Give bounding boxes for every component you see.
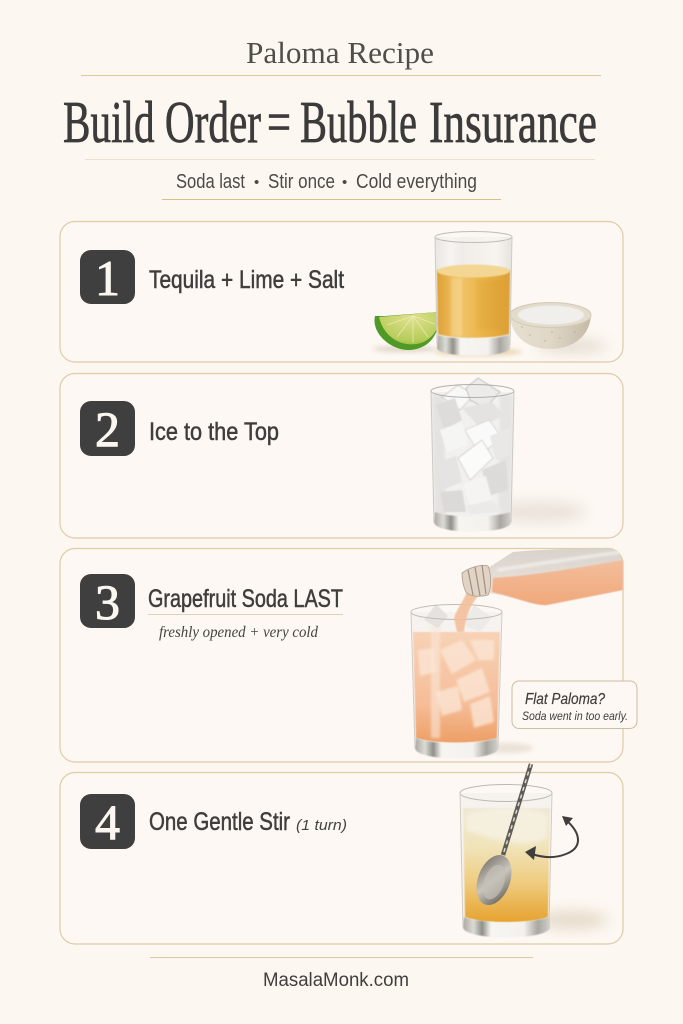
illustration: glass with spoon [460,764,608,938]
panel: step 4 [60,764,623,944]
step 2 heading: Ice to the Top [149,418,279,446]
title: Paloma Recipe: Paloma Recipe [246,35,434,70]
panel: step 3 [60,548,637,762]
illustration: glass with soda and ice [411,604,533,758]
panel: step 1 [60,222,623,362]
subtitle: Cold everything [356,171,477,193]
main heading: Insurance [429,89,597,155]
step 3 note: freshly opened + very cold [159,624,318,641]
callout: flat paloma: Soda went in too early. [522,709,628,723]
main heading [63,89,597,155]
illustration: glass with tequila [434,232,522,356]
subtitle: Soda last [176,171,245,193]
illustration: bottle pouring soda [454,549,623,632]
step 3 number badge [80,574,135,630]
step 4 heading: (1 turn) [296,817,347,834]
spoon [470,764,531,910]
subtitle: • [342,174,347,191]
callout: flat paloma [512,681,637,728]
panel: step 2 [60,374,623,538]
step 2 number badge [80,401,135,457]
illustration: glass filled with ice [431,378,586,532]
main heading: Bubble [300,89,417,155]
callout: flat paloma: Flat Paloma? [525,691,605,708]
step 2 number badge: 2 [95,401,120,457]
main heading: Build Order [63,89,261,155]
step 1 heading: Tequila + Lime + Salt [149,266,344,294]
step 1 number badge [80,250,135,306]
step 4 number badge: 4 [95,794,120,850]
step 3 number badge: 3 [95,574,120,630]
subtitle: • [254,174,259,191]
main heading: = [267,89,291,155]
step 3 heading: Grapefruit Soda LAST [148,585,343,613]
subtitle: Stir once [268,171,335,193]
step 1 number badge: 1 [95,250,120,306]
illustration: lime wedge [373,312,438,352]
step 4 number badge [80,794,135,850]
header [63,35,601,200]
arrow: one turn [525,816,578,860]
illustration: salt bowl [510,302,608,351]
website: MasalaMonk.com [263,970,409,991]
subtitle [176,171,477,193]
step 4 heading: One Gentle Stir [149,808,290,836]
